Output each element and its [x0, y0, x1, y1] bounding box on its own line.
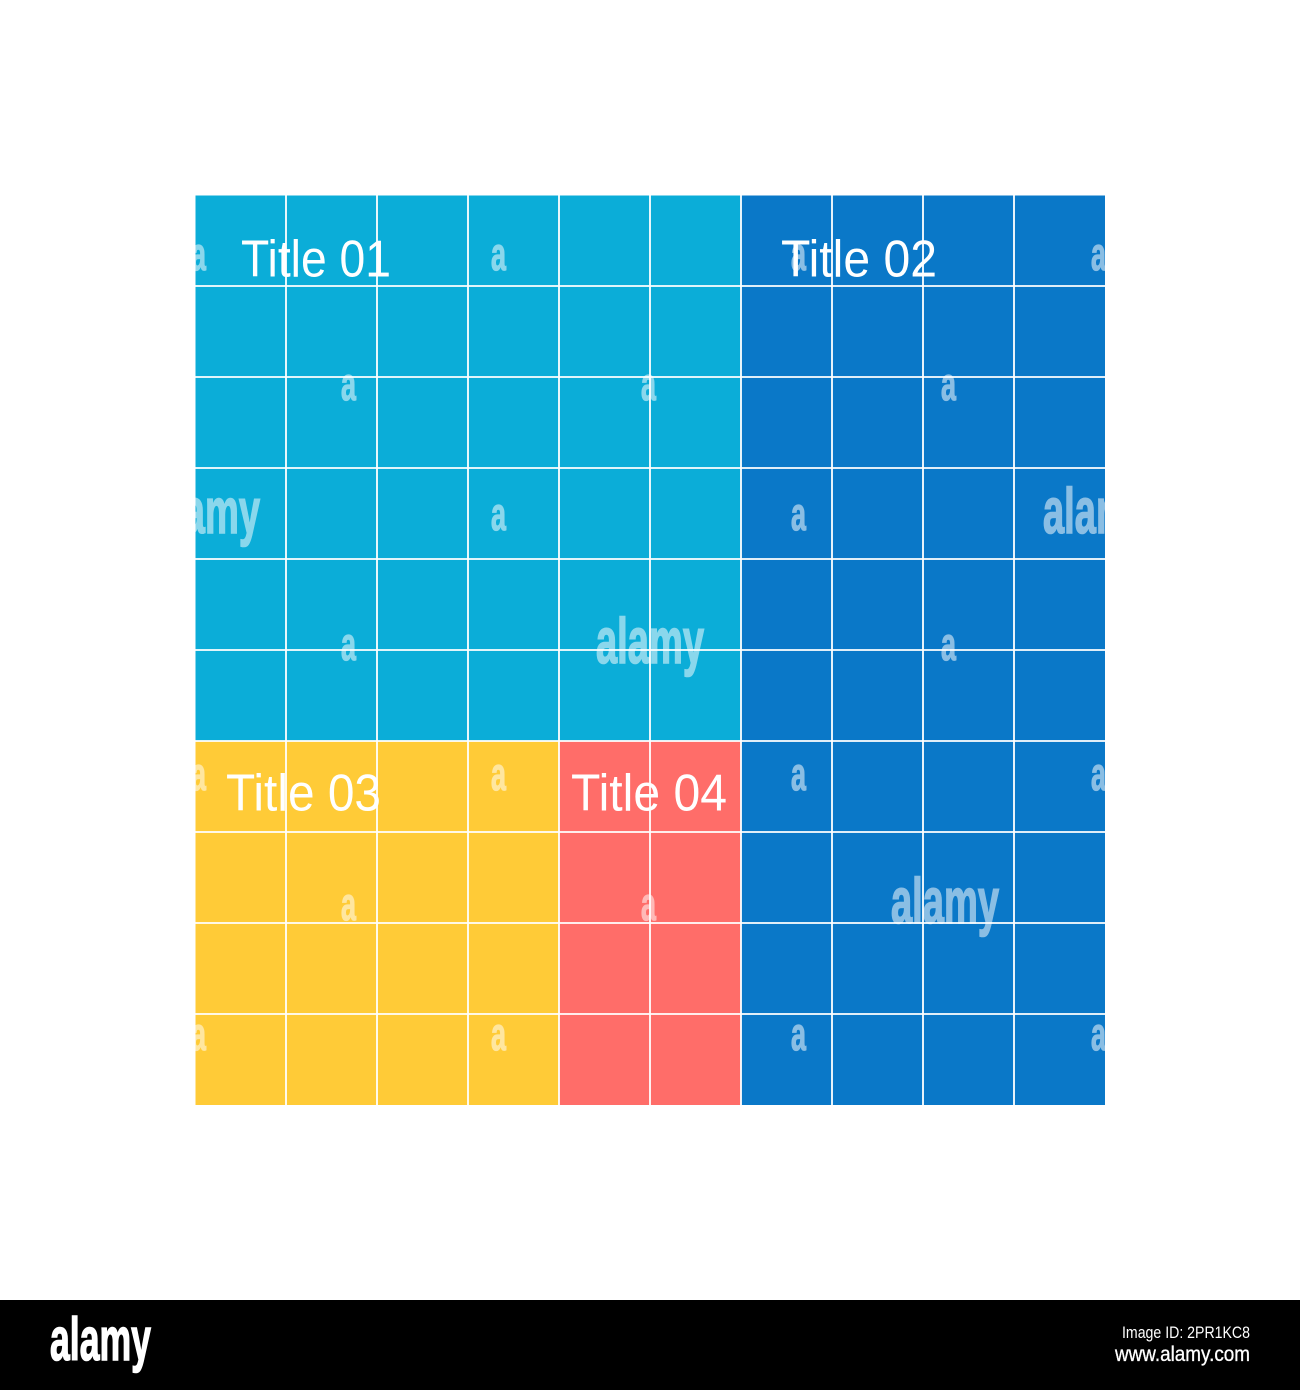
watermarks over chart: a [341, 878, 356, 930]
watermarks over chart: a [191, 748, 206, 800]
watermarks over chart: a [641, 878, 656, 930]
watermarks over chart: a [491, 228, 506, 280]
watermarks over chart: a [941, 618, 956, 670]
watermarks over chart: a [191, 1008, 206, 1060]
heading: title 01: Title 01 [241, 230, 391, 288]
watermarks over chart: alamy [1043, 475, 1151, 547]
watermarks over chart: a [1091, 228, 1106, 280]
watermarks over chart: alamy [152, 475, 260, 547]
watermarks over chart: a [191, 228, 206, 280]
watermarks over chart [196, 244, 1105, 1052]
watermarks over chart: a [791, 228, 806, 280]
heading: title 04: Title 04 [571, 764, 727, 822]
footer bar [0, 1300, 1300, 1390]
watermarks over chart: a [791, 488, 806, 540]
image id: Image ID: 2PR1KC8 [1122, 1323, 1250, 1342]
watermarks over chart: a [341, 358, 356, 410]
panel: title 04 [559, 741, 741, 1105]
panel: title 02 [741, 196, 1105, 1105]
footer logo: alamy [50, 1306, 151, 1373]
watermarks over chart: a [341, 618, 356, 670]
website: www.alamy.com [1114, 1343, 1250, 1366]
watermarks over chart: alamy [596, 605, 704, 677]
watermarks over chart: a [491, 1008, 506, 1060]
watermarks over chart: a [791, 748, 806, 800]
panel: title 03 [196, 741, 559, 1105]
watermarks over chart: a [491, 748, 506, 800]
treemap chart [152, 196, 1151, 1105]
watermarks over chart: a [491, 488, 506, 540]
watermarks over chart: a [1091, 1008, 1106, 1060]
watermarks over chart: a [1091, 748, 1106, 800]
watermarks over chart: a [641, 358, 656, 410]
watermarks over chart: a [791, 1008, 806, 1060]
heading: title 03: Title 03 [226, 764, 381, 822]
watermarks over chart: a [941, 358, 956, 410]
panel: title 01 [196, 196, 741, 741]
watermarks over chart: alamy [891, 865, 999, 937]
heading: title 02: Title 02 [781, 230, 937, 288]
